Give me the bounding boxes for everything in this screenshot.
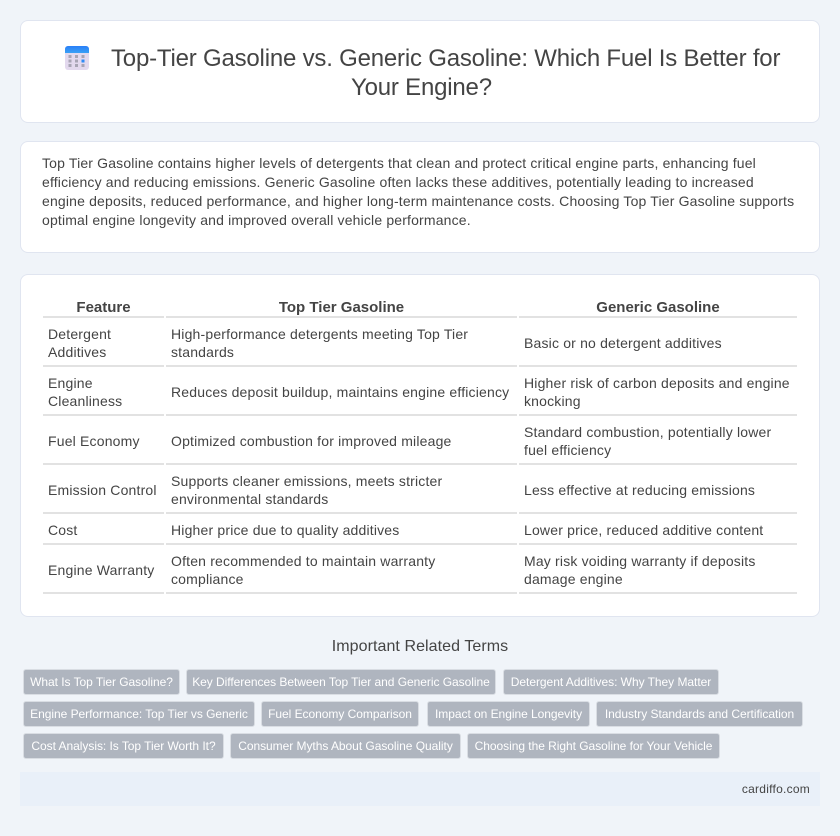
related term tags: Choosing the Right Gasoline for Your Vehicle <box>475 739 712 753</box>
icon: calendar <box>65 46 89 70</box>
intro text: optimal engine longevity and improved overall vehicle performance. <box>42 212 471 228</box>
row: engine cleanliness: Higher risk of carbon deposits and engine <box>524 375 790 391</box>
row: emission control: Less effective at reducing emissions <box>524 482 755 498</box>
intro text: Top Tier Gasoline contains higher levels of detergents that clean and protect critical engine parts, enhancing fuel <box>42 155 756 171</box>
comparison table panel <box>20 274 820 617</box>
row: emission control: Supports cleaner emissions, meets stricter <box>171 473 442 489</box>
related term tags: Cost Analysis: Is Top Tier Worth It? <box>31 739 216 753</box>
row: detergent additives: Basic or no detergent additives <box>524 335 722 351</box>
related term tags: What Is Top Tier Gasoline? <box>30 675 173 689</box>
row: engine cleanliness: Cleanliness <box>48 393 122 409</box>
table header: Feature <box>76 299 131 316</box>
comparison table <box>43 299 797 594</box>
row: fuel economy: Fuel Economy <box>48 433 140 449</box>
row: emission control <box>43 473 797 514</box>
row: detergent additives: Detergent <box>48 326 111 342</box>
row: engine warranty: Engine Warranty <box>48 562 154 578</box>
intro text: efficiency and reducing emissions. Generic Gasoline often lacks these additives, potentially leading to increased <box>42 174 754 190</box>
row: cost <box>43 522 797 545</box>
footer bar <box>20 772 820 806</box>
title <box>111 45 780 101</box>
related term tags: Fuel Economy Comparison <box>268 707 412 721</box>
intro text: engine deposits, reduced performance, and higher long-term maintenance costs. Choosing Top Tier Gasoline supports <box>42 193 794 209</box>
row: engine warranty: Often recommended to maintain warranty <box>171 553 435 569</box>
row: engine cleanliness: Engine <box>48 375 93 391</box>
row: engine warranty: damage engine <box>524 571 623 587</box>
table header: Generic Gasoline <box>596 299 720 316</box>
title: Your Engine? <box>351 74 492 101</box>
title: Top-Tier Gasoline vs. Generic Gasoline: Which Fuel Is Better for <box>111 45 780 72</box>
row: cost: Lower price, reduced additive content <box>524 522 763 538</box>
intro panel <box>20 141 820 253</box>
row: engine cleanliness: knocking <box>524 393 581 409</box>
row: cost: Cost <box>48 522 78 538</box>
row: engine cleanliness <box>43 375 797 416</box>
related term tags: Consumer Myths About Gasoline Quality <box>238 739 453 753</box>
related term tags: Key Differences Between Top Tier and Generic Gasoline <box>192 675 490 689</box>
row: emission control: environmental standards <box>171 491 328 507</box>
row: detergent additives: Additives <box>48 344 106 360</box>
related terms heading: Important Related Terms <box>332 638 508 655</box>
row: detergent additives: standards <box>171 344 234 360</box>
row: engine warranty: compliance <box>171 571 244 587</box>
intro text <box>42 155 794 228</box>
row: fuel economy: Optimized combustion for improved mileage <box>171 433 452 449</box>
footer source: cardiffo.com <box>742 782 810 796</box>
row: engine warranty: May risk voiding warranty if deposits <box>524 553 756 569</box>
table header <box>43 299 797 318</box>
related term tags: Detergent Additives: Why They Matter <box>511 675 711 689</box>
related term tags: Industry Standards and Certification <box>605 707 794 721</box>
related term tags: Engine Performance: Top Tier vs Generic <box>30 707 248 721</box>
row: fuel economy: fuel efficiency <box>524 442 611 458</box>
row: fuel economy: Standard combustion, potentially lower <box>524 424 771 440</box>
row: fuel economy <box>43 424 797 465</box>
row: emission control: Emission Control <box>48 482 157 498</box>
row: detergent additives: High-performance detergents meeting Top Tier <box>171 326 468 342</box>
related term tags <box>23 669 803 759</box>
header panel <box>20 20 820 123</box>
related term tags: Impact on Engine Longevity <box>435 707 582 721</box>
table header: Top Tier Gasoline <box>279 299 404 316</box>
row: engine cleanliness: Reduces deposit buildup, maintains engine efficiency <box>171 384 509 400</box>
row: cost: Higher price due to quality additives <box>171 522 399 538</box>
row: engine warranty <box>43 553 797 594</box>
row: detergent additives <box>43 326 797 367</box>
